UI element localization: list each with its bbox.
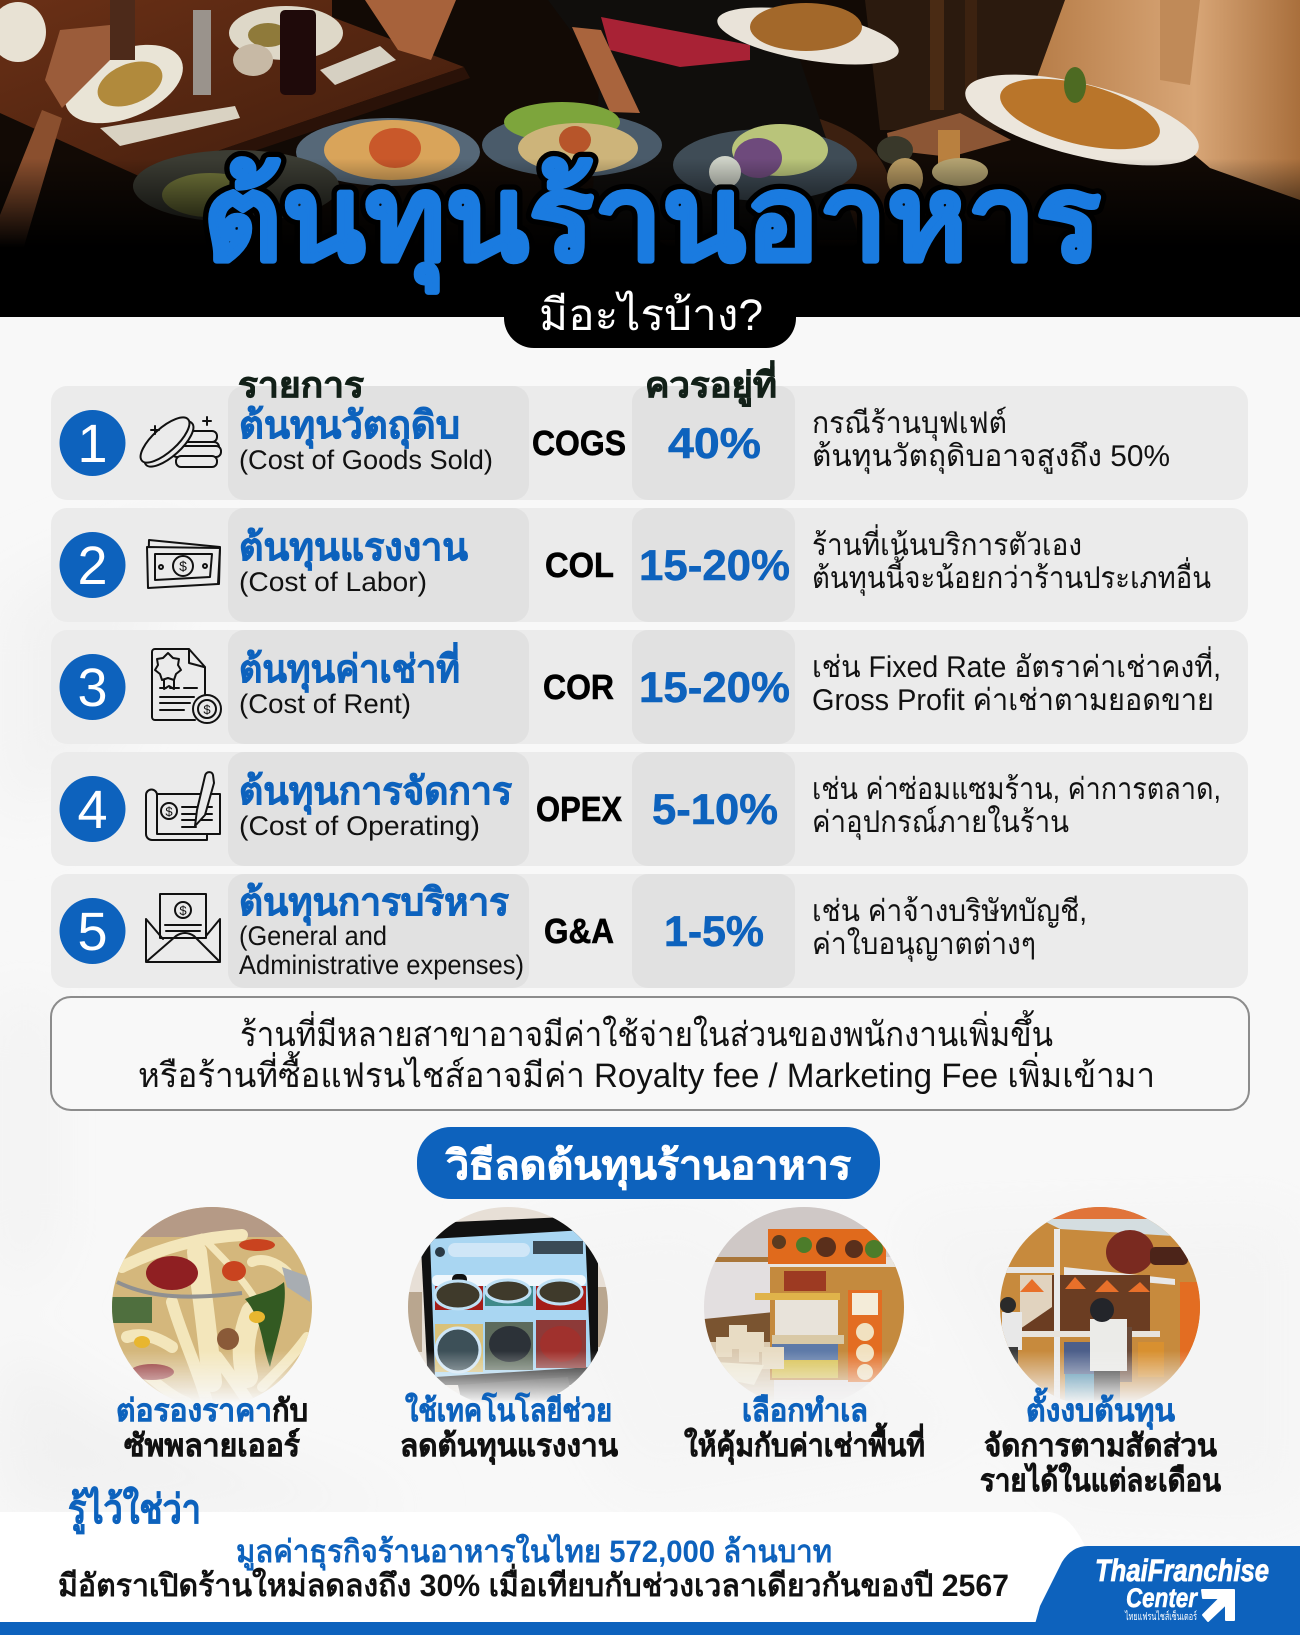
percentages: 15-20%: [639, 542, 790, 590]
footer bar: [0, 1622, 1300, 1635]
row 3 note: เช่น Fixed Rate อัตราค่าเช่าคงที่,: [812, 646, 1221, 684]
diners arms: [45, 25, 110, 108]
row 4 name: ต้นทุนการจัดการ: [239, 771, 513, 815]
percentages: 15-20%: [639, 664, 790, 712]
tip 3 label: เลือกทำเล: [742, 1393, 868, 1428]
row 4 name: [239, 771, 513, 841]
green curry bowl: [133, 150, 339, 222]
title: ต้นทุนร้านอาหาร: [203, 152, 1101, 294]
icon: certificate document: [152, 649, 221, 723]
row 2 name: (Cost of Labor): [239, 567, 427, 597]
percentages: 1-5%: [664, 908, 764, 956]
icon: envelope: $: [179, 903, 187, 918]
row 1 name: ต้นทุนวัตถุดิบ: [239, 405, 460, 449]
photo: food court kiosk: [704, 1207, 905, 1407]
row 3 name: [239, 642, 460, 719]
logo: ThaiFranchise Center: [1032, 1546, 1300, 1635]
server with red sash: [548, 0, 860, 240]
row 1 name: [239, 405, 493, 475]
row 3 name: ต้นทุนค่าเช่าที่: [239, 642, 460, 693]
callout: additional costs: ร้านที่มีหลายสาขาอาจมีค่าใช้จ่ายในส่วนของพนักงานเพิ่มขึ้น: [240, 1009, 1053, 1054]
row 5 note: ค่าใบอนุญาตต่างๆ: [812, 927, 1036, 962]
row 1 background: [51, 386, 1248, 500]
number badges: 2: [77, 536, 108, 596]
number badges: 4: [77, 780, 108, 840]
salad bowl 3: [673, 124, 857, 201]
row 2 name: [239, 527, 468, 597]
row 1 note: [812, 406, 1170, 474]
tip 3 label: [684, 1393, 925, 1465]
callout: additional costs: [51, 997, 1249, 1110]
row 1 note: ต้นทุนวัตถุดิบอาจสูงถึง 50%: [812, 440, 1170, 474]
dining table: [0, 0, 464, 177]
row 5 name: Administrative expenses): [239, 950, 524, 980]
abbreviations: G&A: [544, 912, 614, 951]
photo: papaya salad: [112, 1207, 312, 1407]
waitress hand: [887, 113, 1011, 157]
heading: ways to cut cost: [417, 1127, 880, 1199]
row 4 note: เช่น ค่าซ่อมแซมร้าน, ค่าการตลาด,: [812, 773, 1221, 806]
row 3 name: (Cost of Rent): [239, 689, 411, 719]
logo: ThaiFranchise Center: ThaiFranchise: [1095, 1553, 1269, 1588]
tip 4 label: จัดการตามสัดส่วน: [984, 1428, 1217, 1463]
column heading: share: ควรอยู่ที่: [645, 360, 777, 407]
row 2 name: ต้นทุนแรงงาน: [239, 527, 468, 571]
icon: banknotes: $: [179, 558, 187, 574]
row 5 name: [239, 882, 524, 980]
row 1 name: (Cost of Goods Sold): [239, 445, 493, 475]
heading: ways to cut cost: วิธีลดต้นทุนร้านอาหาร: [445, 1144, 852, 1191]
plate: noodles top: [713, 0, 903, 76]
title: ต้นทุนร้านอาหาร: [203, 152, 1101, 294]
tip 3 label: ให้คุ้มกับค่าเช่าพื้นที่: [684, 1422, 925, 1465]
tip 1 label: ต่อรองราคา: [116, 1393, 272, 1428]
chairs and floor: [865, 0, 1065, 130]
icon: envelope: [146, 894, 220, 962]
icon: arrow: [1202, 1590, 1234, 1621]
plate: noodles right: [957, 56, 1207, 184]
percentages: [639, 420, 790, 956]
row 4 note: ค่าอุปกรณ์ภายในร้าน: [812, 805, 1069, 840]
table settings: [0, 0, 396, 146]
percentages: 40%: [668, 420, 761, 468]
round table behind bowls: [630, 110, 890, 270]
abbreviations: COGS: [532, 424, 626, 463]
panel: cost table: [51, 360, 1248, 988]
row 5 note: เช่น ค่าจ้างบริษัทบัญชี,: [812, 895, 1087, 928]
logo: ThaiFranchise Center: Center: [1126, 1583, 1198, 1613]
panel: did you know: มูลค่าธุรกิจร้านอาหารในไทย 572,000 ล้านบาท: [236, 1533, 832, 1571]
salad bowl 2: [482, 102, 662, 177]
abbreviations: COL: [545, 546, 614, 585]
photo: food stall with customers: [1000, 1207, 1202, 1407]
row 4 background: [51, 752, 1248, 866]
row 5 note: [812, 895, 1087, 962]
tip 1 label: กับ: [272, 1393, 308, 1428]
tip 2 label: ลดต้นทุนแรงงาน: [400, 1428, 618, 1465]
number badges: 5: [77, 902, 108, 962]
abbreviations: [532, 424, 626, 951]
panel: did you know: [0, 1486, 1085, 1622]
row 2 note: ร้านที่เน้นบริการตัวเอง: [812, 524, 1082, 562]
subtitle pill: มีอะไรบ้าง?: [539, 290, 763, 340]
tip 2 label: [400, 1392, 618, 1465]
tip 4 label: [980, 1387, 1221, 1498]
icon: cheque and pen: $: [165, 804, 173, 819]
number badges: 3: [77, 658, 108, 718]
row 2 note: [812, 524, 1211, 596]
icon: cheque and pen: [146, 772, 220, 840]
header photo: [0, 0, 1300, 317]
tip 1 label: ซัพพลายเออร์: [124, 1428, 300, 1463]
callout: additional costs: หรือร้านที่ซื้อแฟรนไชส์อาจมีค่า Royalty fee / Marketing Fee เพิ่มเข้ามา: [138, 1050, 1155, 1095]
abbreviations: OPEX: [536, 790, 623, 829]
row 2 background: [51, 508, 1248, 622]
sides: [877, 130, 988, 198]
subtitle pill: [504, 290, 796, 348]
tip 2 label: ใช้เทคโนโลยีช่วย: [405, 1392, 612, 1428]
icon: coins: [134, 410, 221, 474]
row 5 background: [51, 874, 1248, 988]
percentages: 5-10%: [652, 786, 778, 834]
column heading: items: รายการ: [238, 366, 364, 405]
number badges: [60, 410, 126, 964]
row 1 note: กรณีร้านบุฟเฟต์: [812, 406, 1007, 441]
row 4 note: [812, 773, 1221, 840]
panel: did you know: รู้ไว้ใช่ว่า: [68, 1486, 201, 1535]
tip 1 label: [116, 1393, 308, 1463]
row 3 note: [812, 646, 1221, 717]
row 5 name: ต้นทุนการบริหาร: [239, 882, 510, 926]
icon: banknotes: [147, 540, 220, 588]
icon: certificate document: $: [203, 702, 211, 717]
number badges: 1: [77, 414, 108, 474]
logo: ThaiFranchise Center: ไทยแฟรนไชส์เซ็นเตอร์: [1124, 1609, 1197, 1623]
row 4 name: (Cost of Operating): [239, 811, 480, 841]
tip 4 label: รายได้ในแต่ละเดือน: [980, 1462, 1221, 1498]
row 5 name: (General and: [239, 921, 387, 951]
row 3 note: Gross Profit ค่าเช่าตามยอดขาย: [812, 684, 1214, 717]
waitress gold blouse: [1036, 0, 1300, 200]
row 3 background: [51, 630, 1248, 744]
panel: did you know: มีอัตราเปิดร้านใหม่ลดลงถึง 30% เมื่อเทียบกับช่วงเวลาเดียวกันของปี 2567: [58, 1563, 1009, 1603]
abbreviations: COR: [543, 668, 614, 707]
tip 4 label: ตั้งงบต้นทุน: [1026, 1387, 1175, 1430]
photo: tablet POS: [408, 1207, 608, 1407]
row 2 note: ต้นทุนนี้จะน้อยกว่าร้านประเภทอื่น: [812, 556, 1211, 596]
salad bowl 1: [296, 118, 480, 186]
dark gradient: [0, 0, 1300, 317]
